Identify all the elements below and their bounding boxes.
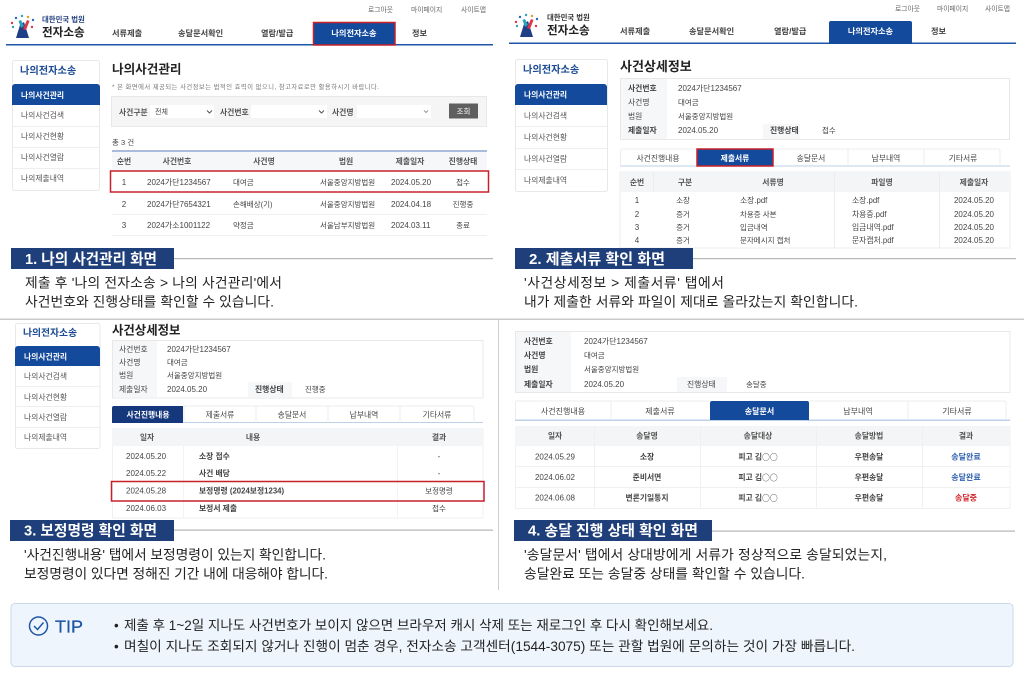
section heading 2: 2. 제출서류 확인 화면 — [529, 251, 665, 268]
header 2: site logo and navigation: 열람/발급 — [774, 26, 807, 36]
submitted documents table: 입금내역 — [740, 222, 768, 232]
case information box: 제출일자 — [524, 379, 554, 389]
sidebar 2: 나의제출내역 — [524, 175, 567, 185]
case progress table: 소장 접수 — [199, 451, 230, 461]
case information box: 사건명 — [524, 350, 546, 360]
header 1: site logo and navigation — [6, 5, 493, 46]
description 3: '사건진행내용' 탭에서 보정명령이 있는지 확인합니다. — [24, 548, 326, 562]
case information box: 법원 — [628, 111, 642, 121]
case table: 법원 — [339, 156, 353, 166]
case table: 제출일자 — [396, 156, 425, 166]
case table: 진행상태 — [449, 156, 477, 166]
section heading 1 — [11, 248, 493, 269]
case progress table: - — [438, 469, 441, 478]
case information box: 서울중앙지방법원 — [584, 364, 639, 374]
case progress table: 2024.06.03 — [126, 504, 167, 513]
case table: 2024가소1001122 — [147, 221, 211, 230]
submitted documents table: 순번 — [630, 177, 644, 187]
case information box — [620, 78, 1010, 140]
tabs 4: 제출서류 — [645, 406, 675, 416]
tabs 3: 송달문서 — [278, 410, 306, 420]
case progress table: 보정명령 — [425, 486, 453, 496]
service documents table: 송달명 — [636, 430, 658, 440]
sidebar 2: 나의사건열람 — [524, 154, 567, 164]
case information box: 법원 — [119, 370, 133, 380]
tabs 4 — [515, 401, 1010, 421]
tabs 3: 사건진행내용 — [126, 410, 170, 420]
case table: 진행중 — [453, 199, 473, 209]
case table: 2 — [122, 200, 127, 209]
sidebar 2: 나의사건검색 — [524, 110, 567, 120]
tabs 4: 송달문서 — [745, 406, 774, 416]
tabs 2: 사건진행내용 — [636, 153, 680, 163]
service documents table: 일자 — [548, 430, 563, 440]
submitted documents table: 차용증.pdf — [852, 210, 887, 219]
service documents table: 2024.05.29 — [535, 452, 576, 462]
case information box: 대여금 — [584, 350, 605, 360]
icon: court logo — [11, 15, 34, 38]
sidebar 3: 나의제출내역 — [24, 432, 67, 442]
case table: 서울중앙지방법원 — [320, 199, 375, 209]
header 2: site logo and navigation: 전자소송 — [547, 24, 590, 37]
heading: case details: 사건상세정보 — [620, 59, 692, 74]
service documents table: 송달완료 — [951, 472, 981, 482]
service documents table: 2024.06.02 — [535, 473, 576, 482]
submitted documents table: 문자캡처.pdf — [852, 235, 895, 245]
description 2 — [524, 276, 858, 310]
header 1: site logo and navigation: 정보 — [412, 28, 428, 38]
highlight box: correction order row — [112, 482, 484, 501]
highlight box: first case row — [110, 171, 488, 192]
panel 2: submitted documents screen — [509, 4, 1016, 310]
tip text: 제출 후 1~2일 지나도 사건번호가 보이지 않으면 브라우저 캐시 삭제 또는 재로그인 후 다시 확인해보세요. — [124, 618, 713, 633]
tip text: • — [114, 639, 119, 654]
case progress table: 보정명령 (2024보정1234) — [199, 486, 284, 496]
case table: 접수 — [456, 178, 470, 187]
section heading 2 — [515, 248, 1016, 269]
service documents table: 송달방법 — [855, 430, 883, 440]
submitted documents table: 서류명 — [762, 177, 784, 187]
case table: 서울남부지방법원 — [320, 220, 375, 230]
header 2: site logo and navigation: 사이트맵 — [985, 4, 1010, 13]
case information box: 진행상태 — [687, 379, 716, 389]
tabs 3: 납부내역 — [350, 410, 378, 420]
header 2: site logo and navigation: 서류제출 — [620, 26, 651, 36]
sidebar 3 — [15, 324, 100, 448]
description 1: 제출 후 '나의 전자소송 > 나의 사건관리'에서 — [25, 276, 282, 290]
service documents table: 2024.06.08 — [535, 494, 576, 502]
service documents table: 송달중 — [955, 492, 978, 502]
tabs 2 — [620, 149, 1010, 166]
tip text: • — [114, 618, 119, 633]
description 2: 내가 제출한 서류와 파일이 제대로 올라갔는지 확인합니다. — [524, 294, 858, 310]
description 4: 송달완료 또는 송달중 상태를 확인할 수 있습니다. — [524, 566, 805, 582]
case information box: 서울중앙지방법원 — [678, 111, 733, 121]
case progress table: - — [438, 452, 441, 461]
case progress table: 2024.05.28 — [126, 486, 167, 496]
sidebar 2: 나의사건관리 — [524, 90, 567, 100]
header 2: site logo and navigation: 마이페이지 — [937, 4, 968, 13]
case table: 서울중앙지방법원 — [320, 177, 375, 187]
case information box: 사건명 — [119, 357, 141, 367]
submitted documents table: 2 — [635, 210, 640, 219]
case progress table — [112, 428, 483, 518]
case progress table: 2024.05.22 — [126, 469, 167, 478]
sidebar 1: 나의사건검색 — [21, 110, 64, 120]
case information box: 제출일자 — [119, 384, 148, 394]
sidebar 2: 나의전자소송 — [523, 63, 579, 76]
case information box: 제출일자 — [628, 125, 658, 135]
panel 1: case management screen — [6, 5, 493, 310]
section heading 3: 3. 보정명령 확인 화면 — [24, 522, 157, 539]
header 2: site logo and navigation — [509, 4, 1016, 44]
case information box: 사건번호 — [524, 336, 553, 346]
header 2: site logo and navigation: 대한민국 법원 — [547, 13, 590, 22]
sidebar 1: 나의사건열람 — [21, 152, 64, 162]
service documents table: 결과 — [959, 430, 973, 440]
case progress table: 내용 — [246, 432, 260, 442]
panel 4: service status screen — [514, 332, 1015, 582]
submitted documents table: 3 — [635, 223, 640, 232]
submitted documents table: 2024.05.20 — [954, 236, 995, 245]
case table: 손해배상(기) — [233, 199, 273, 209]
case table: 약정금 — [233, 220, 254, 230]
service documents table: 송달대상 — [744, 430, 772, 440]
service documents table: 변론기일통지 — [625, 492, 669, 502]
case information box: 2024.05.20 — [678, 126, 719, 135]
case information box — [112, 340, 483, 398]
case information box: 사건번호 — [628, 83, 657, 93]
case information box — [516, 332, 1010, 392]
header 1: site logo and navigation: 사이트맵 — [461, 5, 486, 14]
case table: 사건명 — [253, 156, 275, 166]
sidebar 3: 나의전자소송 — [23, 326, 77, 339]
service documents table: 피고 김○○ — [738, 452, 778, 462]
section heading 4: 4. 송달 진행 상태 확인 화면 — [528, 522, 698, 539]
tabs 2: 기타서류 — [949, 154, 977, 163]
case information box: 송달중 — [746, 380, 767, 389]
sidebar 3: 나의사건현황 — [24, 392, 67, 402]
sidebar 2: 나의사건현황 — [524, 132, 567, 142]
submitted documents table: 4 — [635, 236, 640, 245]
case table: 순번 — [117, 156, 131, 166]
case table: 3 — [122, 221, 127, 230]
case progress table: 접수 — [432, 504, 446, 513]
header 1: site logo and navigation: 전자소송 — [42, 26, 85, 39]
submitted documents table: 2024.05.20 — [954, 223, 995, 232]
case information box: 2024.05.20 — [584, 380, 625, 389]
header 2: site logo and navigation: 송달문서확인 — [689, 26, 734, 36]
sidebar 2 — [515, 60, 608, 192]
tip label: TIP — [55, 616, 83, 636]
section heading 4 — [514, 520, 1015, 541]
description 3: 보정명령이 있다면 정해진 기간 내에 대응해야 합니다. — [24, 566, 328, 582]
heading: case management: 나의사건관리 — [112, 62, 182, 76]
case information box: 진행상태 — [770, 125, 799, 135]
case table: 2024.03.11 — [391, 221, 431, 230]
case information box: 사건번호 — [119, 344, 148, 354]
panel 3: correction order screen — [10, 324, 493, 582]
header 1: site logo and navigation: 로그아웃 — [368, 5, 393, 14]
tabs 4: 납부내역 — [843, 406, 873, 416]
tabs 3: 제출서류 — [206, 410, 234, 420]
tabs 2: 제출서류 — [721, 153, 749, 163]
sidebar 1 — [12, 60, 100, 190]
section heading 1: 1. 나의 사건관리 화면 — [25, 251, 157, 268]
header 2: site logo and navigation: 정보 — [931, 26, 947, 36]
case progress table: 보정서 제출 — [199, 503, 237, 513]
case information box: 2024가단1234567 — [678, 83, 742, 93]
case progress table: 결과 — [432, 432, 446, 442]
heading: case details: 사건상세정보 — [112, 324, 180, 338]
service documents table: 피고 김○○ — [738, 472, 778, 483]
case progress table: 2024.05.20 — [126, 452, 167, 461]
search filter: 조회 — [457, 107, 470, 116]
submitted documents table: 2024.05.20 — [954, 210, 995, 219]
sidebar 1: 나의제출내역 — [21, 173, 64, 183]
total count: 총 3 건 — [112, 137, 134, 147]
tabs 4: 사건진행내용 — [541, 406, 585, 416]
submitted documents table: 증거 — [676, 210, 690, 219]
description 4 — [524, 548, 887, 582]
service documents table: 우편송달 — [855, 452, 883, 462]
sidebar 1: 나의사건현황 — [21, 131, 64, 141]
submitted documents table: 소장.pdf — [852, 195, 880, 205]
case information box: 2024가단1234567 — [584, 336, 648, 346]
case information box: 진행중 — [305, 384, 326, 394]
submitted documents table: 소장.pdf — [740, 195, 768, 205]
case table: 1 — [122, 178, 127, 187]
service documents table: 피고 김○○ — [738, 492, 778, 504]
submitted documents table: 증거 — [676, 236, 690, 245]
submitted documents table: 소장 — [676, 195, 690, 205]
submitted documents table — [620, 172, 1010, 248]
header 1: site logo and navigation: 서류제출 — [112, 28, 143, 38]
case information box: 사건명 — [628, 97, 650, 107]
submitted documents table: 1 — [635, 196, 640, 205]
case table: 사건번호 — [163, 156, 191, 166]
service documents table: 소장 — [640, 452, 654, 462]
description 3 — [24, 548, 328, 582]
note text: * 본 화면에서 제공되는 사건정보는 법적인 효력이 없으니, 참고자료로만 활용하시기 바랍니다. — [112, 82, 379, 91]
tabs 4: 기타서류 — [942, 407, 972, 416]
submitted documents table: 입금내역.pdf — [852, 222, 895, 232]
case information box: 대여금 — [678, 97, 699, 107]
submitted documents table: 차용증 사본 — [740, 210, 777, 219]
description 1 — [25, 276, 282, 310]
submitted documents table: 구분 — [678, 178, 692, 187]
tabs 3: 기타서류 — [423, 410, 451, 420]
service documents table — [515, 426, 1010, 508]
service documents table: 우편송달 — [855, 492, 883, 502]
header 1: site logo and navigation: 송달문서확인 — [178, 28, 223, 38]
case information box: 대여금 — [167, 357, 188, 367]
search filter: 사건구분 — [119, 107, 148, 117]
case table: 2024가단1234567 — [147, 177, 211, 187]
search filter: 사건번호 — [220, 107, 249, 117]
service documents table: 준비서면 — [633, 472, 661, 482]
icon: court logo — [515, 14, 538, 37]
section heading 3 — [10, 520, 493, 541]
case table: 2024가단7654321 — [147, 199, 211, 209]
case progress table: 일자 — [140, 432, 155, 442]
case table — [112, 150, 487, 236]
search filter: 전체 — [155, 107, 168, 116]
submitted documents table: 2024.05.20 — [954, 196, 995, 205]
sidebar 1: 나의전자소송 — [20, 64, 76, 77]
search filter: 사건명 — [332, 107, 354, 117]
description 4: '송달문서' 탭에서 상대방에게 서류가 정상적으로 송달되었는지, — [524, 548, 887, 562]
case progress table: 사건 배당 — [199, 468, 230, 478]
tabs 2: 송달문서 — [797, 154, 825, 163]
case information box: 서울중앙지방법원 — [167, 370, 222, 380]
description 1: 사건번호와 진행상태를 확인할 수 있습니다. — [25, 294, 274, 310]
header 2: site logo and navigation: 나의전자소송 — [848, 26, 894, 36]
sidebar 3: 나의사건열람 — [24, 412, 67, 422]
tabs 2: 납부내역 — [872, 153, 900, 163]
header 1: site logo and navigation: 마이페이지 — [411, 5, 442, 14]
header 1: site logo and navigation: 나의전자소송 — [331, 28, 377, 38]
description 2: '사건상세정보 > 제출서류' 탭에서 — [524, 276, 724, 290]
submitted documents table: 파일명 — [871, 177, 893, 187]
sidebar 3: 나의사건관리 — [24, 352, 67, 362]
case table: 종료 — [456, 221, 470, 230]
case table: 대여금 — [233, 177, 254, 187]
service documents table: 우편송달 — [855, 472, 883, 482]
search filter — [112, 96, 486, 126]
sidebar 3: 나의사건검색 — [24, 371, 67, 381]
submitted documents table: 문자메시지 캡처 — [740, 236, 790, 245]
icon: check circle — [30, 617, 48, 635]
header 2: site logo and navigation: 로그아웃 — [895, 4, 920, 13]
submitted documents table: 제출일자 — [960, 177, 989, 187]
tip text — [114, 618, 855, 654]
case information box: 접수 — [822, 126, 836, 135]
tabs 3 — [112, 406, 483, 423]
tip text: 며칠이 지나도 조회되지 않거나 진행이 멈춘 경우, 전자소송 고객센터(1544-3075) 또는 관할 법원에 문의하는 것이 가장 빠릅니다. — [124, 639, 855, 654]
submitted documents table: 증거 — [676, 223, 690, 232]
case information box: 진행상태 — [255, 384, 284, 394]
sidebar 1: 나의사건관리 — [21, 90, 64, 100]
header 1: site logo and navigation: 대한민국 법원 — [42, 15, 85, 24]
service documents table: 송달완료 — [951, 452, 981, 462]
case information box: 2024가단1234567 — [167, 344, 231, 354]
case table: 2024.04.18 — [391, 200, 432, 209]
case information box: 법원 — [524, 364, 538, 374]
case table: 2024.05.20 — [391, 178, 432, 187]
case information box: 2024.05.20 — [167, 385, 208, 394]
header 1: site logo and navigation: 열람/발급 — [261, 28, 294, 38]
tip box — [11, 604, 1013, 666]
